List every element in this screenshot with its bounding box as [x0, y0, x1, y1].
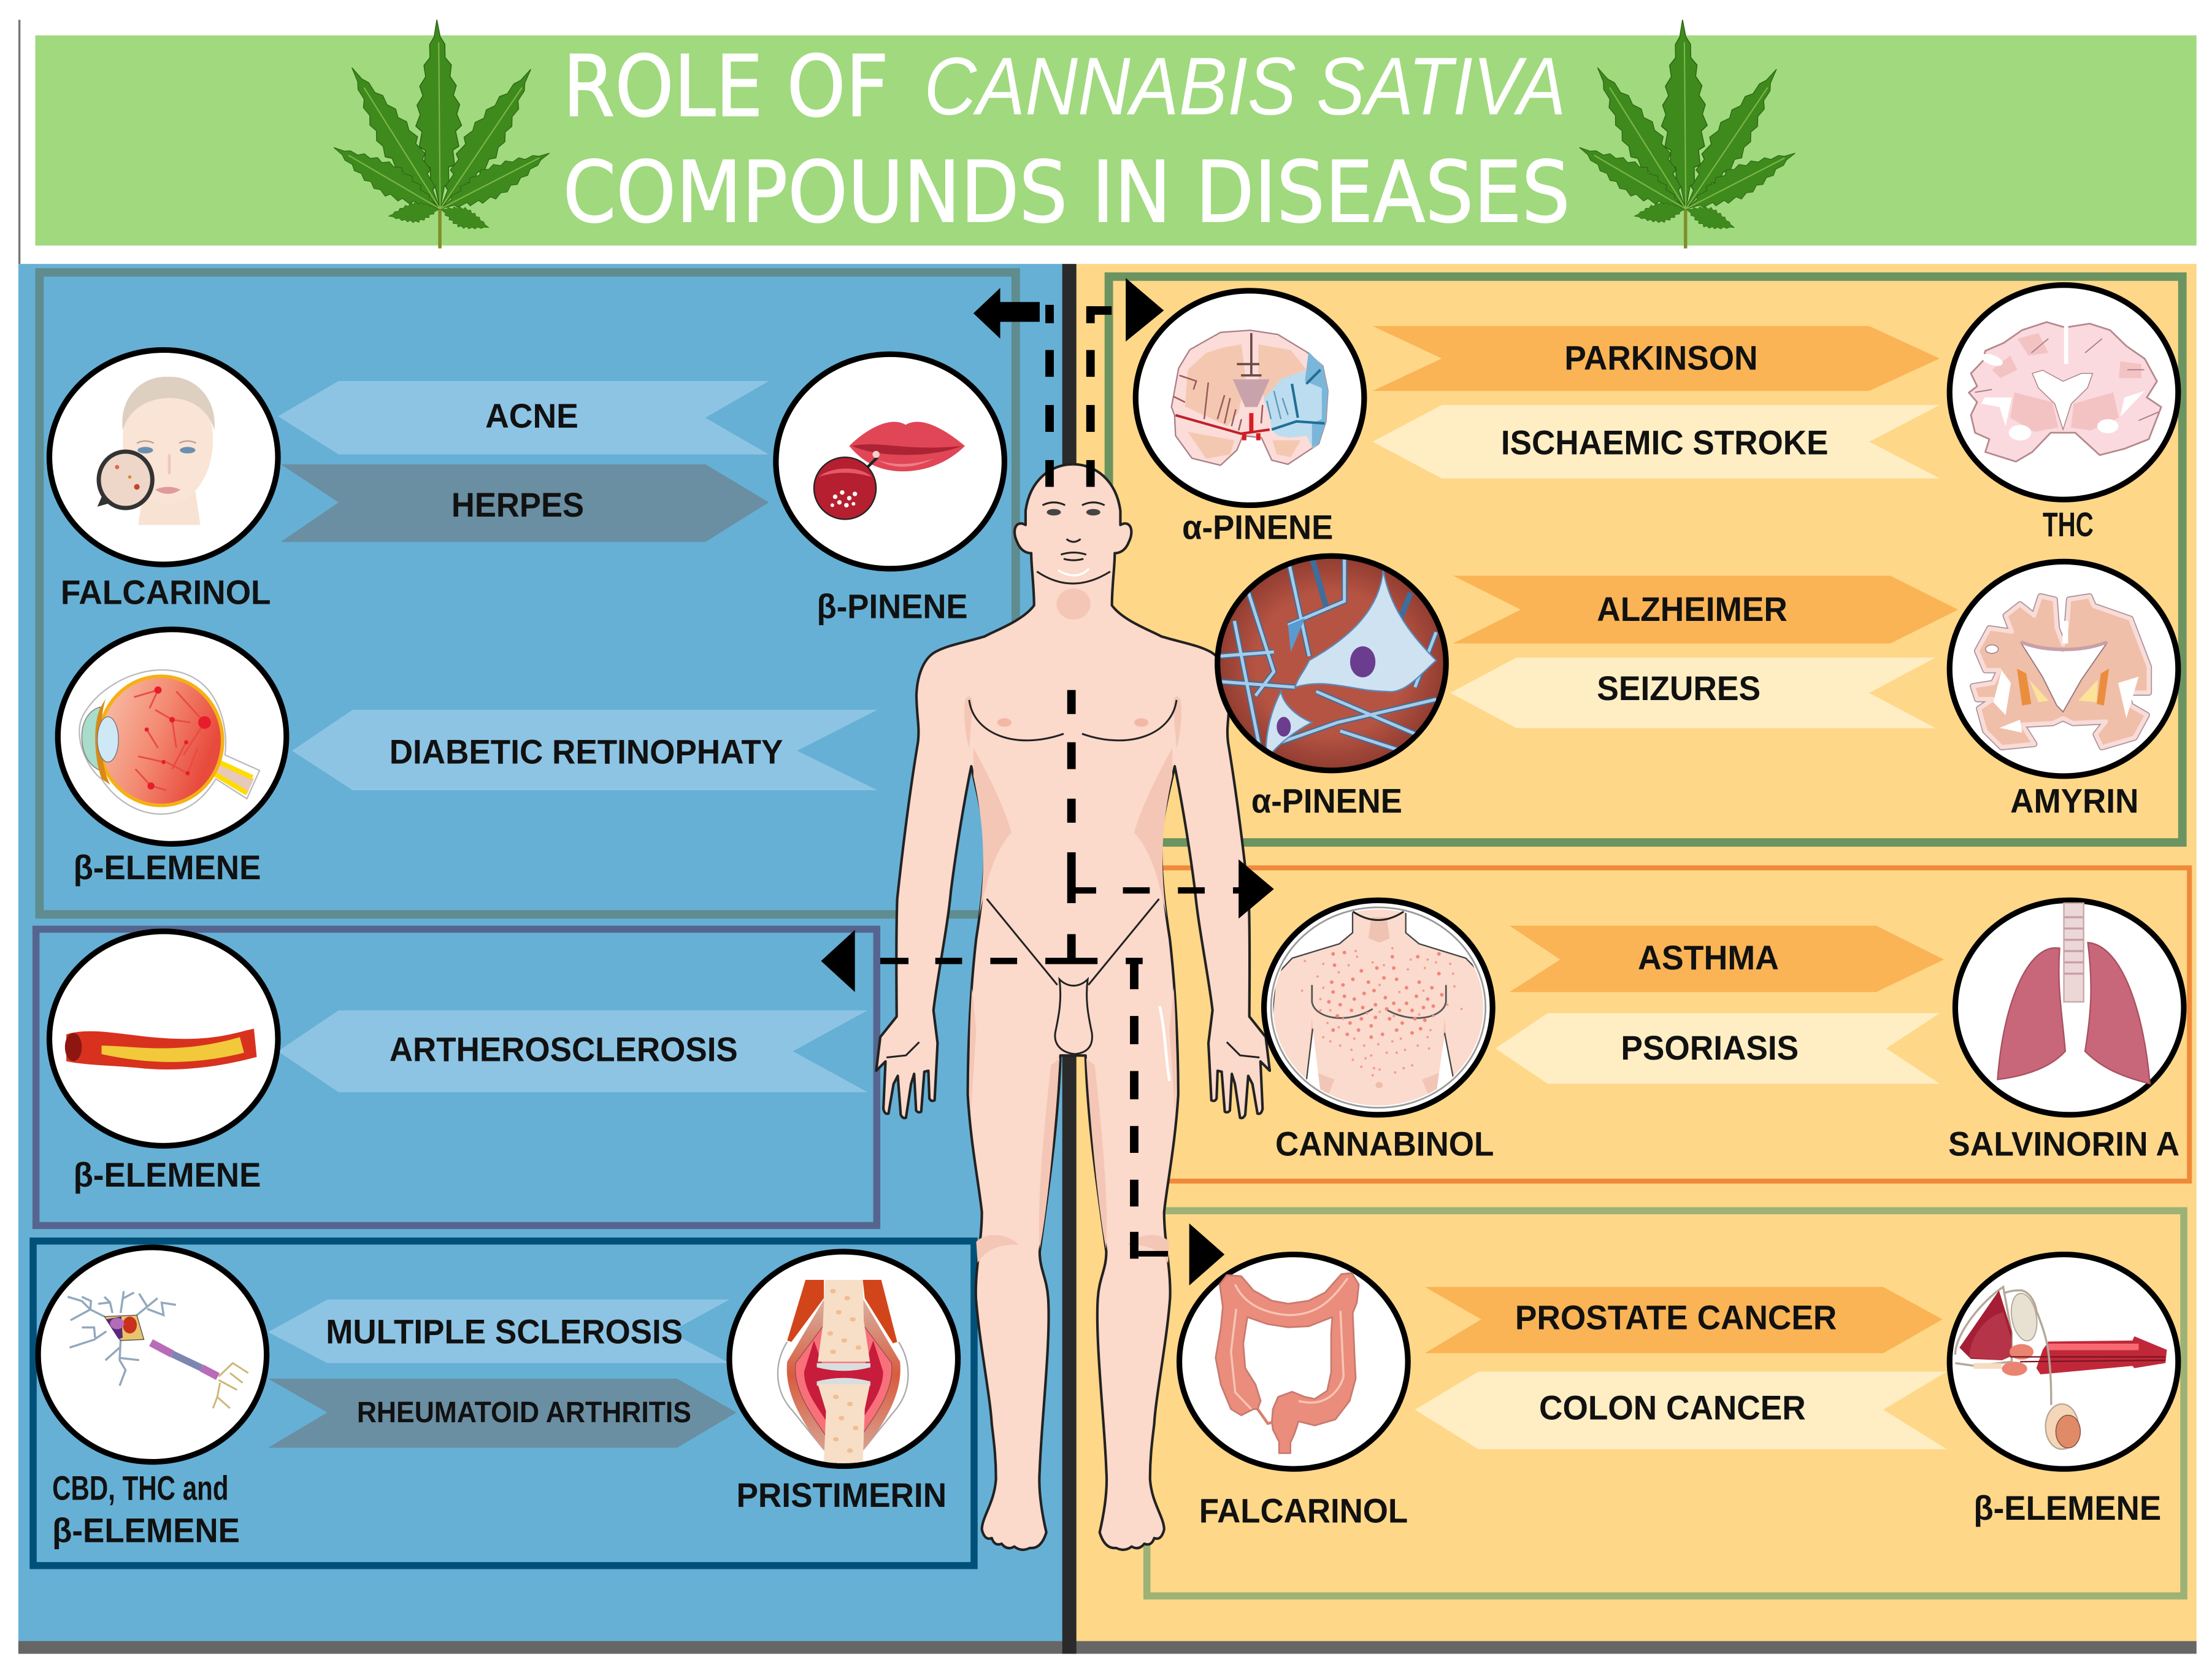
- panel: asthma psoriasis frame: [1157, 868, 2189, 1181]
- banner: ischaemic stroke: [1373, 405, 1940, 479]
- panel: sclerosis arthritis frame: [33, 1241, 974, 1566]
- banner: multiple sclerosis: MULTIPLE SCLEROSIS: [326, 1312, 683, 1350]
- panel: left blue background: [18, 264, 1065, 1654]
- banner: asthma: [1510, 926, 1944, 992]
- icon: lips with herpes: [776, 354, 1004, 569]
- banner: rheumatoid arthritis: [268, 1379, 736, 1448]
- bottom strip: [18, 1641, 2197, 1654]
- title text: CANNABIS SATIVA: [924, 40, 1566, 132]
- banner: prostate cancer: PROSTATE CANCER: [1515, 1298, 1837, 1336]
- icon: brain with enlarged ventricle: [1949, 561, 2178, 776]
- genital area: [1055, 979, 1092, 1054]
- torso and hand lines: [886, 700, 1259, 1058]
- panel: acne herpes retinopathy frame: [39, 272, 1016, 914]
- label: beta-elemene eye: β-ELEMENE: [74, 849, 261, 887]
- banner: psoriasis: PSORIASIS: [1621, 1029, 1799, 1067]
- banner: herpes: HERPES: [451, 486, 584, 524]
- banner: diabetic retinopathy: [292, 710, 877, 790]
- banner: seizures: SEIZURES: [1597, 669, 1761, 707]
- icon: knee joint: [729, 1252, 958, 1466]
- icon: colon: [1180, 1255, 1408, 1469]
- banner: colon cancer: COLON CANCER: [1539, 1389, 1806, 1427]
- label: alpha-pinene 2: α-PINENE: [1251, 782, 1402, 820]
- title text: ROLE OF: [563, 37, 889, 136]
- icon: neurons close-up: [1218, 556, 1446, 771]
- body right half: [1073, 464, 1270, 1550]
- banner: psoriasis: [1496, 1013, 1940, 1084]
- label: amyrin: AMYRIN: [2010, 782, 2138, 820]
- banner: asthma: ASTHMA: [1638, 939, 1779, 977]
- title banner: [35, 36, 2197, 245]
- icon: cannabis leaf right: [1571, 20, 1803, 248]
- panel: brain diseases frame: [1109, 277, 2183, 842]
- icon: eye with retinopathy: [58, 630, 286, 844]
- arrow: dashed to left panel: [821, 930, 1143, 992]
- small psoriasis dots: [1302, 949, 1462, 1076]
- arrow: dashed leg to cancer panel: [1134, 961, 1224, 1285]
- banner: acne: [278, 381, 769, 455]
- banner: atherosclerosis: ARTHEROSCLEROSIS: [390, 1031, 738, 1069]
- banner: prostate cancer: [1425, 1287, 1943, 1353]
- central divider: [1062, 264, 1077, 1654]
- label: beta-elemene artery: β-ELEMENE: [74, 1156, 261, 1194]
- icon: lungs: [1955, 900, 2184, 1115]
- icon: artery with plaque: [49, 931, 278, 1146]
- arrow: center dashed to right panel: [1072, 690, 1274, 963]
- label: alpha-pinene 1: α-PINENE: [1182, 509, 1333, 547]
- icon: cannabis leaf left: [326, 20, 557, 248]
- arrow: upper left dashed to head: [974, 288, 1050, 487]
- banner: seizures: [1450, 658, 1935, 728]
- label: falcarinol: FALCARINOL: [61, 573, 271, 611]
- label: beta-elemene prostate: β-ELEMENE: [1973, 1489, 2161, 1527]
- label: cannabinol: CANNABINOL: [1275, 1125, 1494, 1163]
- left edge line: [18, 20, 20, 264]
- human body figure: [876, 464, 1270, 1550]
- label: salvinorin A: SALVINORIN A: [1948, 1125, 2179, 1163]
- body left half: [876, 464, 1073, 1550]
- label: CBD THC beta-elemene: CBD, THC and: [52, 1469, 229, 1508]
- banner: ischaemic stroke: ISCHAEMIC STROKE: [1501, 424, 1828, 462]
- icon: face with acne: [49, 350, 278, 564]
- body shading: [964, 588, 1181, 1263]
- label: falcarinol colon: FALCARINOL: [1199, 1492, 1408, 1530]
- banner: alzheimer: [1453, 576, 1958, 644]
- label: pristimerin: PRISTIMERIN: [736, 1476, 947, 1514]
- nipples: [997, 718, 1148, 726]
- face details: [1037, 503, 1110, 583]
- banner: atherosclerosis: [278, 1011, 867, 1092]
- label: CBD THC beta-elemene: [52, 1469, 240, 1550]
- icon: prostate and penis: [1949, 1255, 2178, 1469]
- banner: colon cancer: [1415, 1371, 1947, 1449]
- banner: alzheimer: ALZHEIMER: [1597, 590, 1788, 628]
- psoriasis dots: [1329, 952, 1442, 1037]
- banner: rheumatoid arthritis: RHEUMATOID ARTHRITIS: [357, 1396, 691, 1429]
- title text: [563, 37, 1570, 242]
- panel: atherosclerosis frame: [36, 929, 877, 1225]
- label: CBD THC beta-elemene: β-ELEMENE: [52, 1512, 240, 1550]
- banner: parkinson: [1373, 326, 1940, 391]
- banner: multiple sclerosis: [268, 1300, 729, 1363]
- icon: brain stroke: [1135, 291, 1364, 505]
- label: beta-pinene: β-PINENE: [817, 587, 968, 625]
- banner: herpes: [281, 464, 769, 542]
- arrow: upper right dashed to head: [1088, 278, 1164, 487]
- title text: COMPOUNDS IN DISEASES: [563, 143, 1570, 242]
- icon: brain coronal section: [1949, 285, 2178, 499]
- panel: cancers frame: [1147, 1211, 2184, 1596]
- icon: neuron: [38, 1247, 267, 1462]
- thigh highlight: [1159, 1006, 1169, 1081]
- label: THC: THC: [2043, 506, 2094, 544]
- banner: acne: ACNE: [485, 397, 578, 435]
- panel: right yellow background: [1075, 264, 2197, 1654]
- banner: diabetic retinopathy: DIABETIC RETINOPHATY: [390, 733, 783, 771]
- banner: parkinson: PARKINSON: [1564, 339, 1757, 377]
- icon: chest with psoriasis: [1262, 900, 1496, 1129]
